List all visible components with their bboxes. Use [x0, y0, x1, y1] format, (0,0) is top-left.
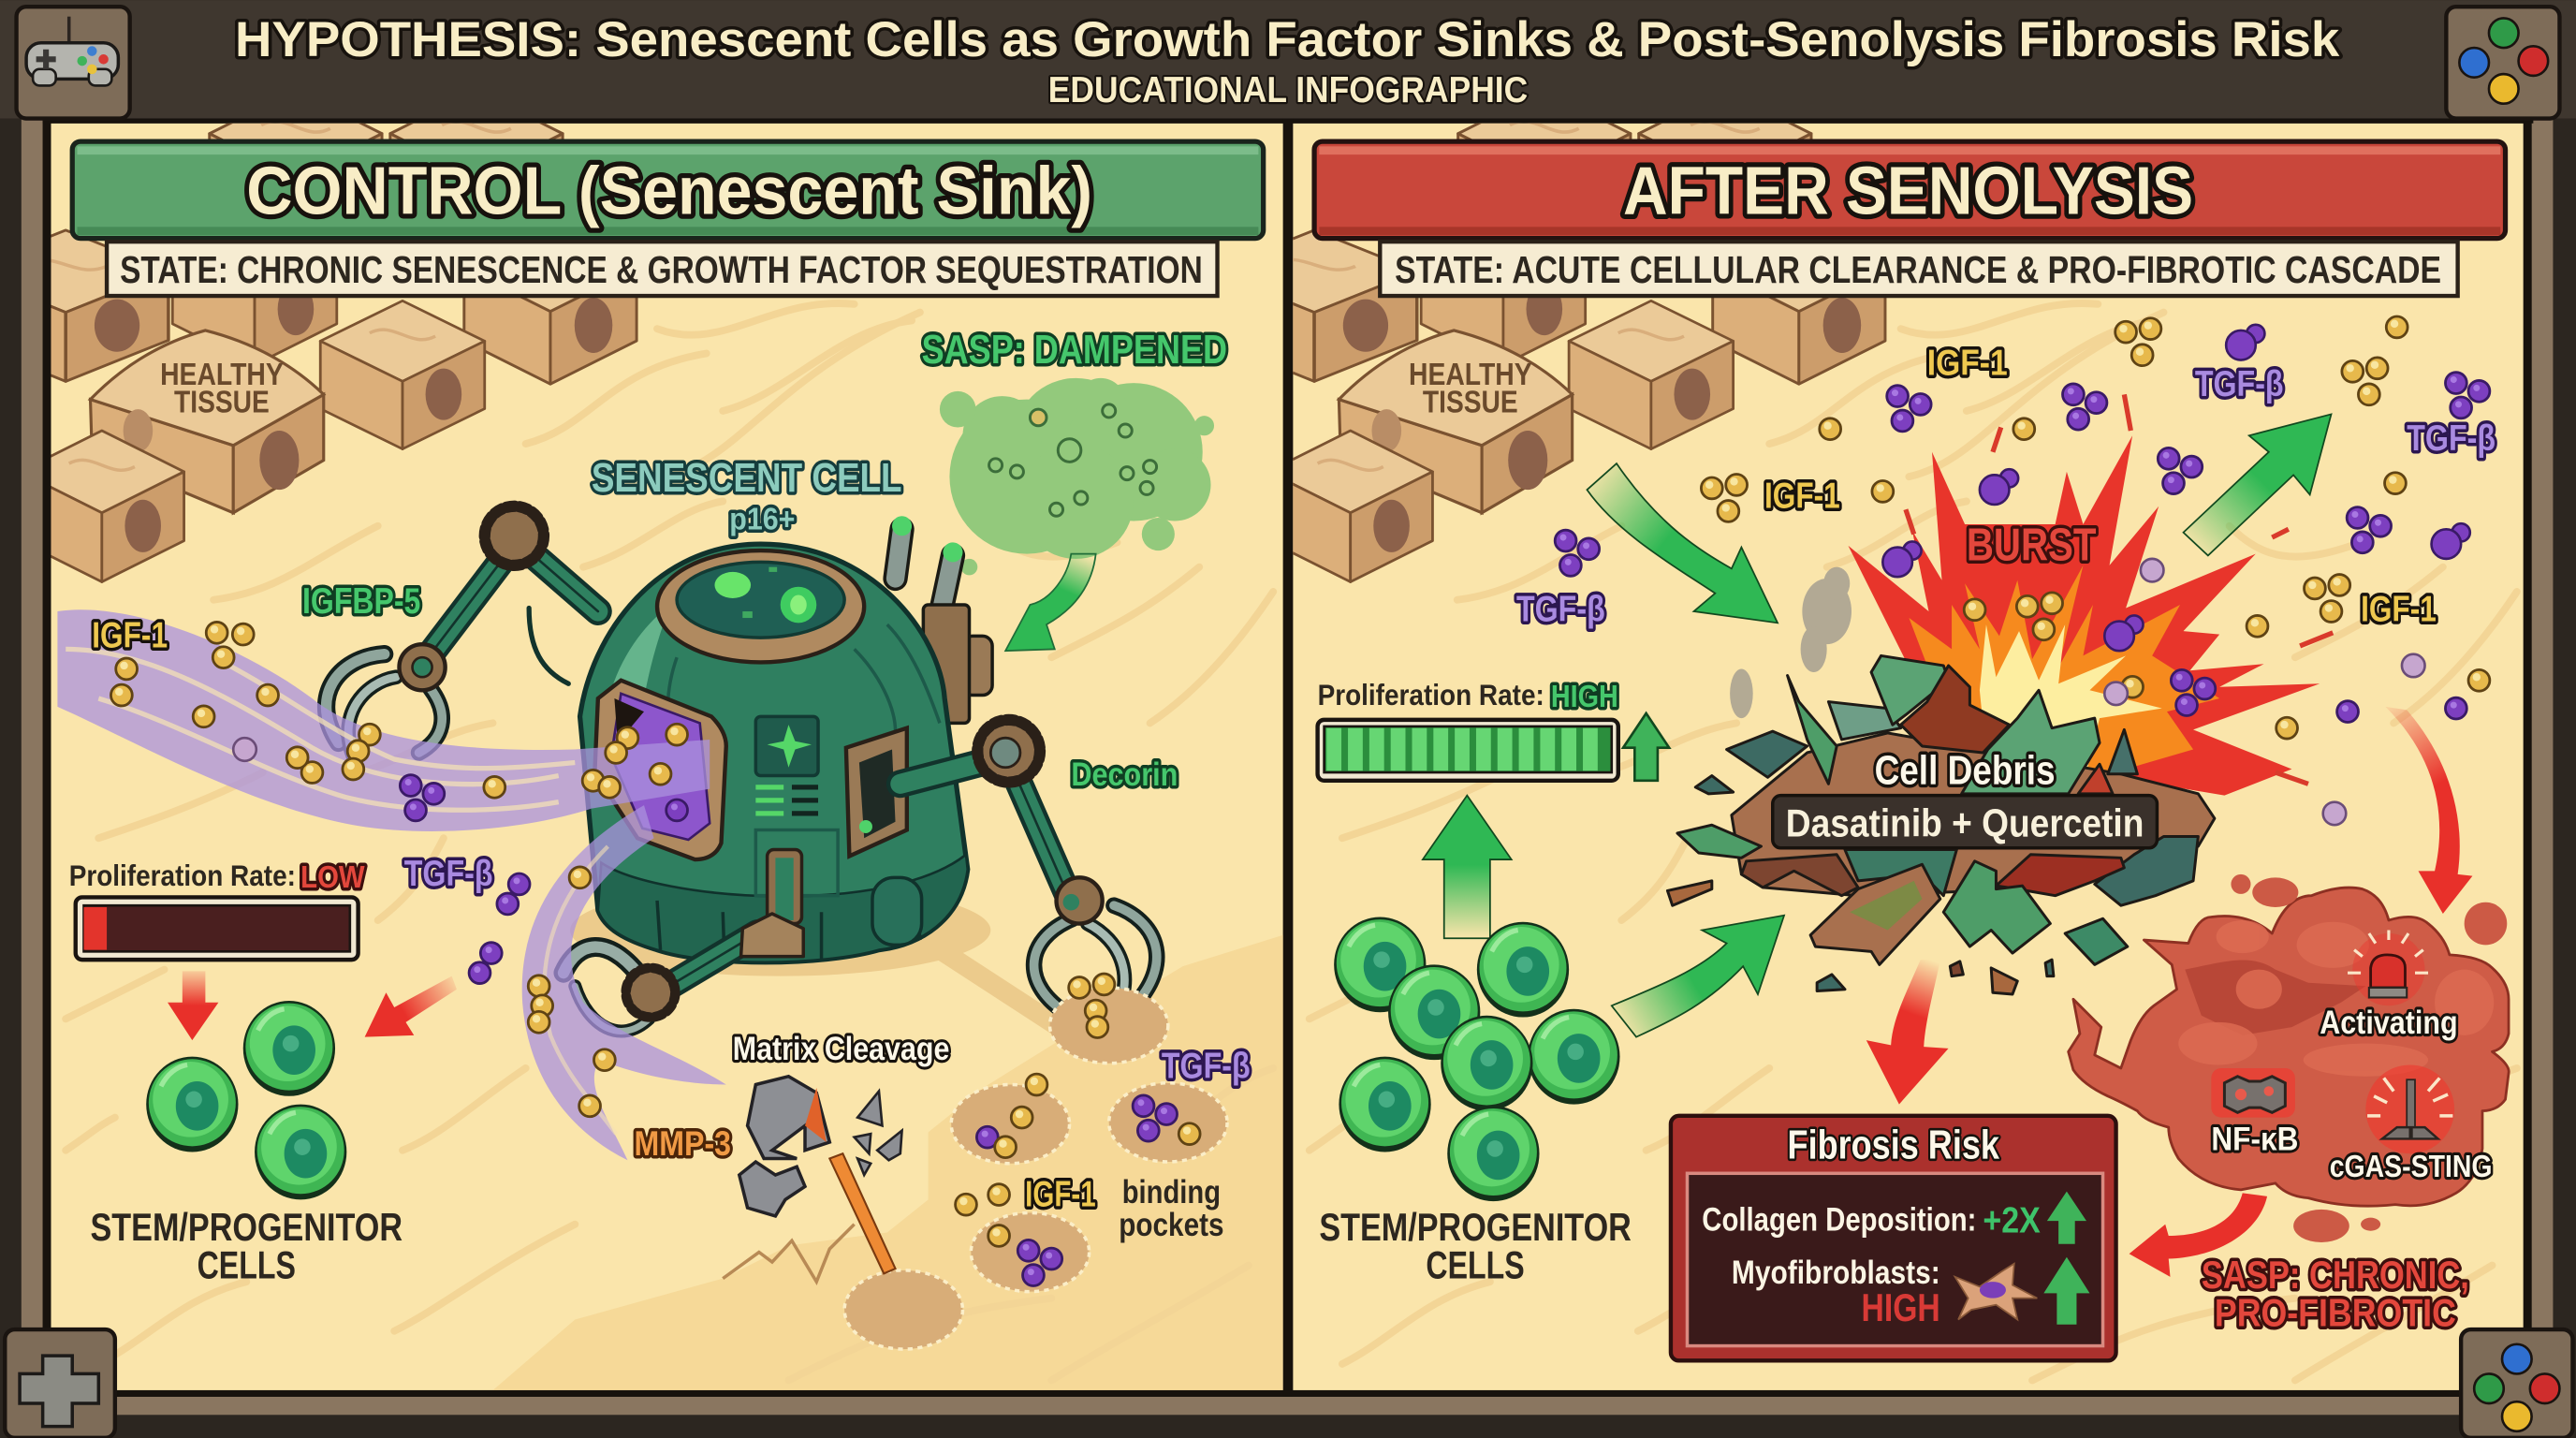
purple flow stream: IGF-1 into cell — [57, 609, 710, 831]
text: growth factor labels — [1516, 343, 2496, 630]
control state bar: STATE: CHRONIC SENESCENCE & GROWTH FACTOR SEQUESTRATION — [120, 248, 1203, 291]
center control panel — [755, 716, 818, 814]
panel: fibrosis risk — [1671, 1116, 2116, 1360]
text: senescent cell — [592, 455, 902, 536]
title: HYPOTHESIS: Senescent Cells as Growth Factor Sinks & Post-Senolysis Fibrosis Risk — [235, 12, 2340, 67]
text: growth factor labels: IGF-1 — [1764, 476, 1840, 516]
dome window — [657, 550, 864, 662]
icon: buttons top right — [2446, 7, 2559, 119]
arm lower with claw — [564, 850, 803, 1031]
proliferation rate high: Proliferation Rate: — [1318, 678, 1544, 712]
text: SASP chronic: SASP: CHRONIC, — [2202, 1253, 2469, 1297]
text: stem progenitor right: CELLS — [1426, 1243, 1525, 1287]
label: dasatinib quercetin: Dasatinib + Quercetin — [1786, 800, 2144, 844]
text: binding pockets — [1120, 1180, 1222, 1243]
arrow: red to fibrosis box — [2130, 1193, 2267, 1277]
text: senescent cell: p16+ — [729, 502, 795, 536]
text: stem progenitor right — [1319, 1205, 1632, 1287]
stat: collagen deposition: Collagen Deposition: — [1702, 1202, 1976, 1239]
text: senescent cell: SENESCENT CELL — [592, 455, 902, 501]
arrow: red to SASP cloud — [2385, 707, 2472, 914]
stem cells right — [1334, 917, 1620, 1201]
text: SASP dampened: SASP: DAMPENED — [922, 327, 1227, 373]
heading: Fibrosis Risk — [1788, 1122, 1999, 1167]
healthy tissue cubes — [1211, 91, 1885, 581]
text: stem progenitor right: STEM/PROGENITOR — [1319, 1205, 1632, 1249]
text: healthy tissue: HEALTHY — [160, 358, 284, 392]
icon: NF-kB — [2211, 1068, 2295, 1118]
stat: myofibroblasts: HIGH — [1862, 1285, 1940, 1329]
text: healthy tissue — [162, 363, 283, 413]
text: growth factor labels: TGF-β — [1516, 590, 1605, 630]
arrow: red down to stem cells — [168, 971, 218, 1040]
text: decorin: Decorin — [1071, 756, 1178, 793]
text: IGF-1 left: IGF-1 — [92, 616, 168, 656]
stem cells left — [146, 1001, 346, 1199]
icon: d-pad bottom left — [5, 1329, 115, 1438]
proliferation rate high — [1318, 678, 1669, 781]
arrow: green up from stem cells — [1423, 796, 1512, 938]
arm upper left — [327, 506, 598, 756]
text: activating: Activating — [2320, 1005, 2458, 1041]
text: growth factor labels: TGF-β — [2195, 364, 2284, 404]
arrow: green curved to debris — [1612, 916, 1784, 1037]
MMP-3 shards and blade — [723, 1077, 902, 1282]
text: TGF-beta pocket: TGF-β — [1162, 1046, 1251, 1086]
explosion burst — [1848, 394, 2333, 796]
text: SASP chronic — [2202, 1253, 2469, 1335]
proliferation rate high: HIGH — [1551, 680, 1618, 714]
icon: buttons bottom right — [2461, 1329, 2572, 1438]
text: burst: BURST — [1967, 521, 2097, 571]
ground shadow — [573, 906, 1053, 1034]
text: IGFBP-5: IGFBP-5 — [302, 581, 420, 622]
text: stem progenitor left: STEM/PROGENITOR — [91, 1205, 402, 1249]
stat: collagen deposition — [1702, 1192, 2086, 1244]
stat: myofibroblasts — [1732, 1255, 2089, 1329]
text: IGF-1 pocket: IGF-1 — [1025, 1174, 1096, 1214]
text: cell debris: Cell Debris — [1875, 747, 2056, 793]
text: growth factor labels: IGF-1 — [2361, 590, 2437, 630]
after senolysis header — [1314, 141, 2506, 239]
growth factor particles released — [1555, 316, 2490, 825]
text: healthy tissue: HEALTHY — [1409, 358, 1532, 392]
text: binding pockets: pockets — [1119, 1207, 1224, 1243]
text: TGF-beta left: TGF-β — [404, 854, 493, 894]
text: growth factor labels: IGF-1 — [1927, 343, 2008, 383]
control header — [72, 141, 1264, 239]
sand background — [51, 124, 1283, 1390]
sand background — [1293, 124, 2524, 1390]
arrow: green into debris — [1587, 463, 1778, 623]
text: healthy tissue: TISSUE — [1423, 386, 1518, 420]
dome body — [580, 544, 968, 962]
text: healthy tissue — [1409, 358, 1532, 420]
icon: cGAS-STING — [2365, 1064, 2454, 1153]
arrow: green out of burst — [2184, 414, 2331, 555]
arrow: red diagonal to stem cells — [365, 976, 457, 1037]
side port — [846, 728, 907, 857]
proliferation rate low: LOW — [300, 860, 365, 895]
text: healthy tissue: TISSUE — [174, 386, 270, 420]
subtitle: EDUCATIONAL INFOGRAPHIC — [1048, 70, 1528, 110]
healthy tissue cubes — [51, 124, 638, 583]
purple flow stream: lower — [522, 805, 726, 1160]
arrow: red down to fibrosis — [1866, 960, 1949, 1105]
cell debris pile — [1667, 655, 2215, 994]
proliferation rate low — [69, 858, 365, 960]
text: SASP chronic: PRO-FIBROTIC — [2215, 1291, 2456, 1335]
text: MMP-3: MMP-3 — [634, 1124, 731, 1163]
smoke — [1730, 567, 1852, 718]
ECM binding pockets — [844, 974, 1227, 1349]
control state bar — [107, 242, 1218, 296]
panel: control — [0, 91, 1283, 1390]
green SASP cloud — [940, 378, 1214, 575]
stat: collagen deposition: +2X — [1983, 1200, 2041, 1240]
text: binding pockets: binding — [1122, 1174, 1221, 1211]
after senolysis header: AFTER SENOLYSIS — [1623, 154, 2193, 228]
text: NF-kB: NF-κB — [2211, 1122, 2298, 1158]
text: growth factor labels: TGF-β — [2407, 418, 2496, 459]
panel: after senolysis — [1211, 91, 2524, 1390]
red SASP cloud — [2069, 874, 2509, 1242]
icon: alarm beacon — [2348, 931, 2428, 1005]
proliferation rate low: Proliferation Rate: — [69, 858, 296, 892]
text: stem progenitor left — [92, 1211, 402, 1279]
text: cGAS-STING: cGAS-STING — [2330, 1150, 2492, 1184]
back equipment — [892, 516, 992, 723]
text: matrix cleavage: Matrix Cleavage — [733, 1031, 949, 1067]
intake port — [594, 681, 726, 859]
arm right — [900, 720, 1157, 1016]
arrow: SASP down to cell — [1005, 554, 1096, 651]
control header: CONTROL (Senescent Sink) — [246, 154, 1092, 228]
senescent cell machine — [327, 506, 1157, 1044]
icon: gamepad top left — [17, 7, 130, 119]
text: stem progenitor left: CELLS — [198, 1243, 296, 1287]
stat: myofibroblasts: Myofibroblasts: — [1732, 1255, 1940, 1291]
IGF-1 and TGF-beta particles in flow — [110, 622, 688, 1117]
